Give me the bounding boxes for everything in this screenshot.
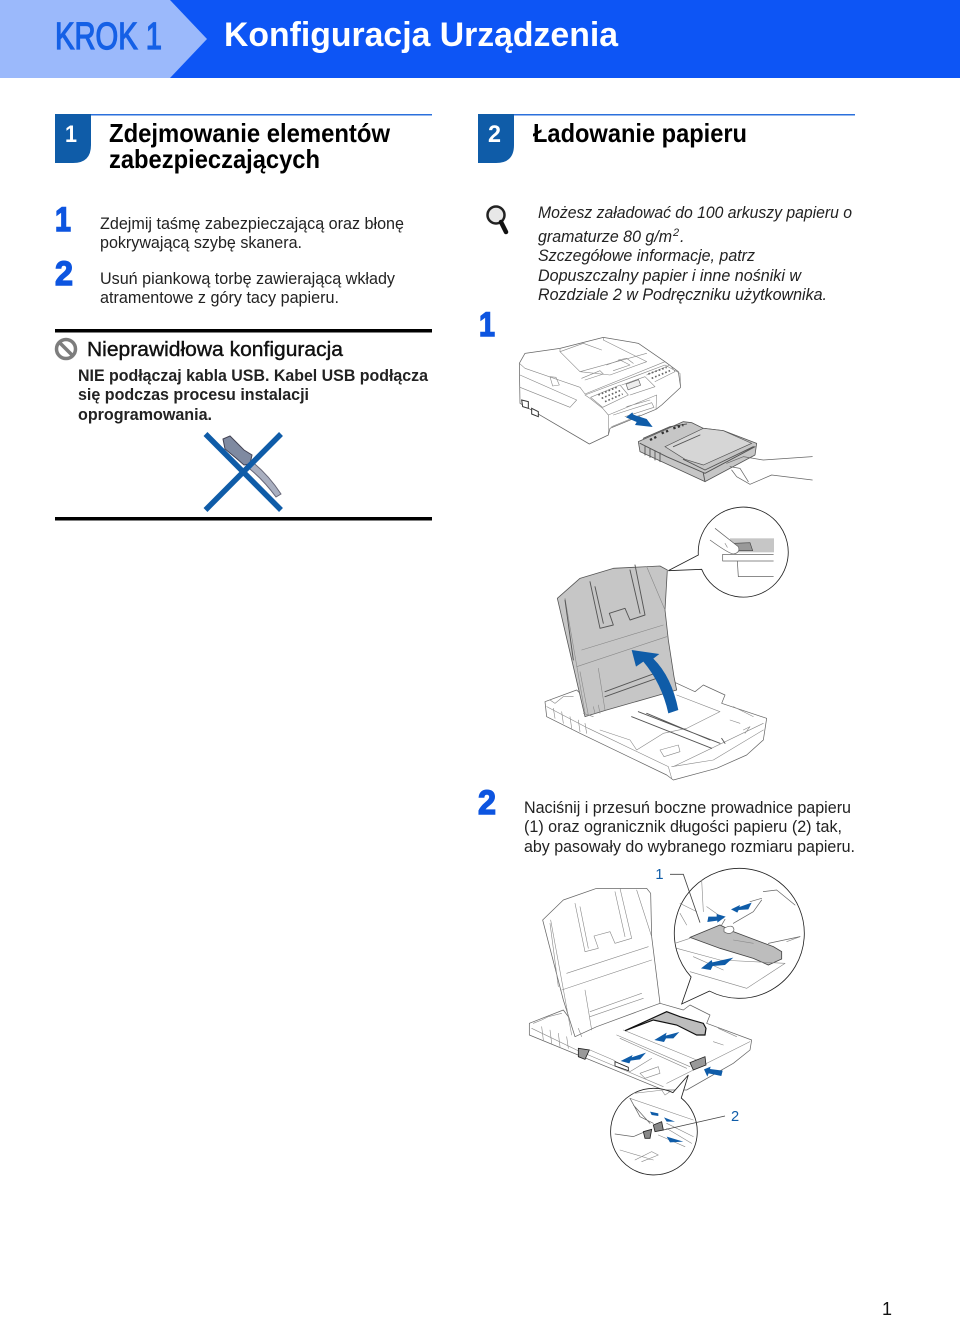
step 1 left: 1: [55, 201, 71, 239]
step 2 right number: 2: [478, 784, 496, 822]
warning panel: [55, 329, 432, 520]
callout label 2: 2: [731, 1109, 739, 1125]
section heading 1: Zdejmowanie elementów: [109, 118, 391, 148]
note text: Możesz załadować do 100 arkuszy papieru o: [538, 204, 852, 222]
step 2 left: 2: [55, 255, 73, 293]
note text: [538, 204, 852, 304]
page title: Konfiguracja Urządzenia: [224, 16, 619, 54]
step 2 left: Usuń piankową torbę zawierającą wkłady: [100, 270, 396, 288]
step 1 left: [55, 201, 404, 252]
step label: KROK 1: [55, 16, 162, 58]
step 1 left: Zdejmij taśmę zabezpieczającą oraz błonę: [100, 215, 404, 233]
icon: prohibited: [56, 340, 76, 358]
section heading 1: zabezpieczających: [109, 144, 320, 174]
section heading 1: [55, 114, 432, 174]
step 2 left: atramentowe z góry tacy papieru.: [100, 289, 339, 307]
note text: Rozdziale 2 w Podręczniku użytkownika.: [538, 286, 827, 304]
step 2 text: Naciśnij i przesuń boczne prowadnice papieru: [524, 799, 851, 817]
step 2 text: aby pasowały do wybranego rozmiaru papieru.: [524, 838, 855, 856]
callout label 1: [655, 867, 700, 923]
note text: 2: [672, 227, 679, 239]
illustration: adjusting paper guides: [529, 867, 804, 1175]
section heading 2: 2: [488, 121, 501, 148]
section heading 1: 1: [65, 121, 77, 148]
note text: gramaturze 80 g/m: [538, 228, 672, 246]
note text: Dopuszczalny papier i inne nośniki w: [538, 267, 802, 285]
step 2 text: (1) oraz ogranicznik długości papieru (2) tak,: [524, 818, 842, 836]
step 2 left: [55, 255, 396, 307]
section heading 2: Ładowanie papieru: [533, 118, 747, 148]
warning panel: oprogramowania.: [78, 406, 212, 424]
header banner: [0, 0, 960, 78]
illustration: tray with raised cover: [545, 507, 788, 780]
section heading 2: [478, 114, 855, 163]
step 2 text: [524, 799, 855, 856]
magnified view: length stop: [611, 1075, 697, 1175]
note text: Szczegółowe informacje, patrz: [538, 247, 755, 265]
icon: magnifier note: [488, 206, 506, 232]
illustration: printer with tray pulled out: [519, 337, 812, 484]
callout label 2: [663, 1109, 739, 1130]
icon: crossed USB cable: [206, 434, 281, 510]
magnified view: paper guide: [674, 868, 804, 1004]
warning panel: NIE podłączaj kabla USB. Kabel USB podłącza: [78, 367, 429, 385]
warning panel: się podczas procesu instalacji: [78, 386, 309, 404]
warning panel: Nieprawidłowa konfiguracja: [87, 339, 344, 361]
callout label 1: 1: [655, 867, 663, 883]
note text: .: [680, 228, 684, 246]
step 1 left: pokrywającą szybę skanera.: [100, 234, 302, 252]
step 1 right number: 1: [479, 306, 495, 344]
